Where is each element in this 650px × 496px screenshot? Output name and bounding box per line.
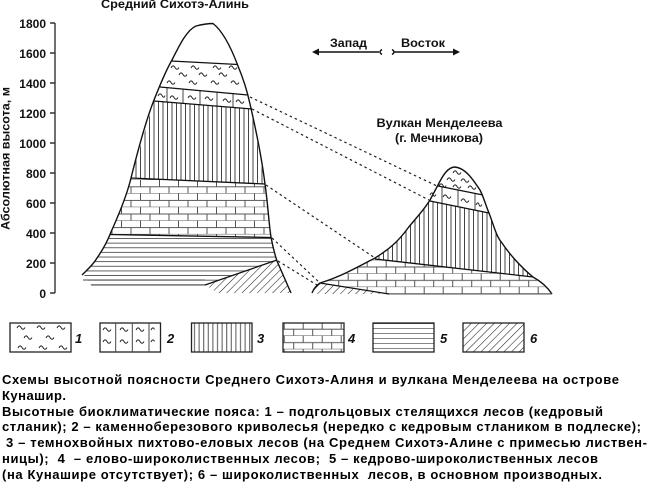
- dotted correlation lines: [250, 97, 437, 285]
- legend item 4: 4: [347, 331, 356, 346]
- caption text: Схемы высотной поясности Среднего Сихотэ-Алиня и вулкана Менделеева на острове: [2, 372, 619, 387]
- y axis: 200: [26, 257, 46, 271]
- title: Вулкан Менделеева: (г. Мечникова): [395, 133, 483, 145]
- legend item 6: [463, 323, 538, 352]
- y axis: 600: [26, 197, 46, 211]
- direction arrows: Запад / Восток: [312, 38, 460, 56]
- mountain: Средний Сихотэ-Алинь: [82, 24, 291, 293]
- legend item 4: [283, 323, 356, 352]
- y axis: 1000: [19, 137, 46, 151]
- y axis: [19, 17, 55, 301]
- y axis: 0: [39, 287, 46, 301]
- caption text: [2, 372, 647, 482]
- direction arrows: Запад / Восток: Восток: [401, 38, 445, 50]
- legend item 2: [100, 323, 175, 352]
- legend item 6: 6: [530, 331, 538, 346]
- y axis: 1600: [19, 47, 46, 61]
- caption text: 3 – темнохвойных пихтово-еловых лесов (на Среднем Сихотэ-Алине с примесью листвен-: [6, 435, 647, 450]
- caption text: стланик); 2 – каменноберезового криволесья (нередко с кедровым стлаником в подлеске);: [2, 419, 641, 434]
- y axis: 1400: [19, 77, 46, 91]
- title: Вулкан Менделеева: Вулкан Менделеева: [376, 118, 503, 130]
- y axis: 1800: [19, 17, 46, 31]
- title: Вулкан Менделеева: [376, 118, 503, 145]
- legend item 1: [10, 323, 82, 352]
- y axis: 1200: [19, 107, 46, 121]
- y axis title: Абсолютная высота, м: [0, 87, 12, 230]
- caption text: Высотные биоклиматические пояса: 1 – подгольцовых стелящихся лесов (кедровый: [2, 404, 603, 419]
- legend item 5: 5: [440, 331, 448, 346]
- legend item 3: 3: [257, 331, 265, 346]
- caption text: ницы); 4 – елово-широколиственных лесов; 5 – кедрово-широколиственных лесов: [2, 451, 598, 466]
- mountain: вулкан Менделеева: [312, 167, 555, 296]
- legend item 1: 1: [75, 331, 82, 346]
- legend: [10, 323, 538, 352]
- caption text: Кунашир.: [2, 388, 66, 403]
- legend item 3: [192, 323, 265, 352]
- caption text: (на Кунашире отсутствует); 6 – широколиственных лесов, в основном производных.: [2, 467, 602, 482]
- y axis: 800: [26, 167, 46, 181]
- y axis: 400: [26, 227, 46, 241]
- direction arrows: Запад / Восток: Запад: [330, 38, 368, 50]
- legend item 5: [373, 323, 448, 352]
- legend item 2: 2: [166, 331, 175, 346]
